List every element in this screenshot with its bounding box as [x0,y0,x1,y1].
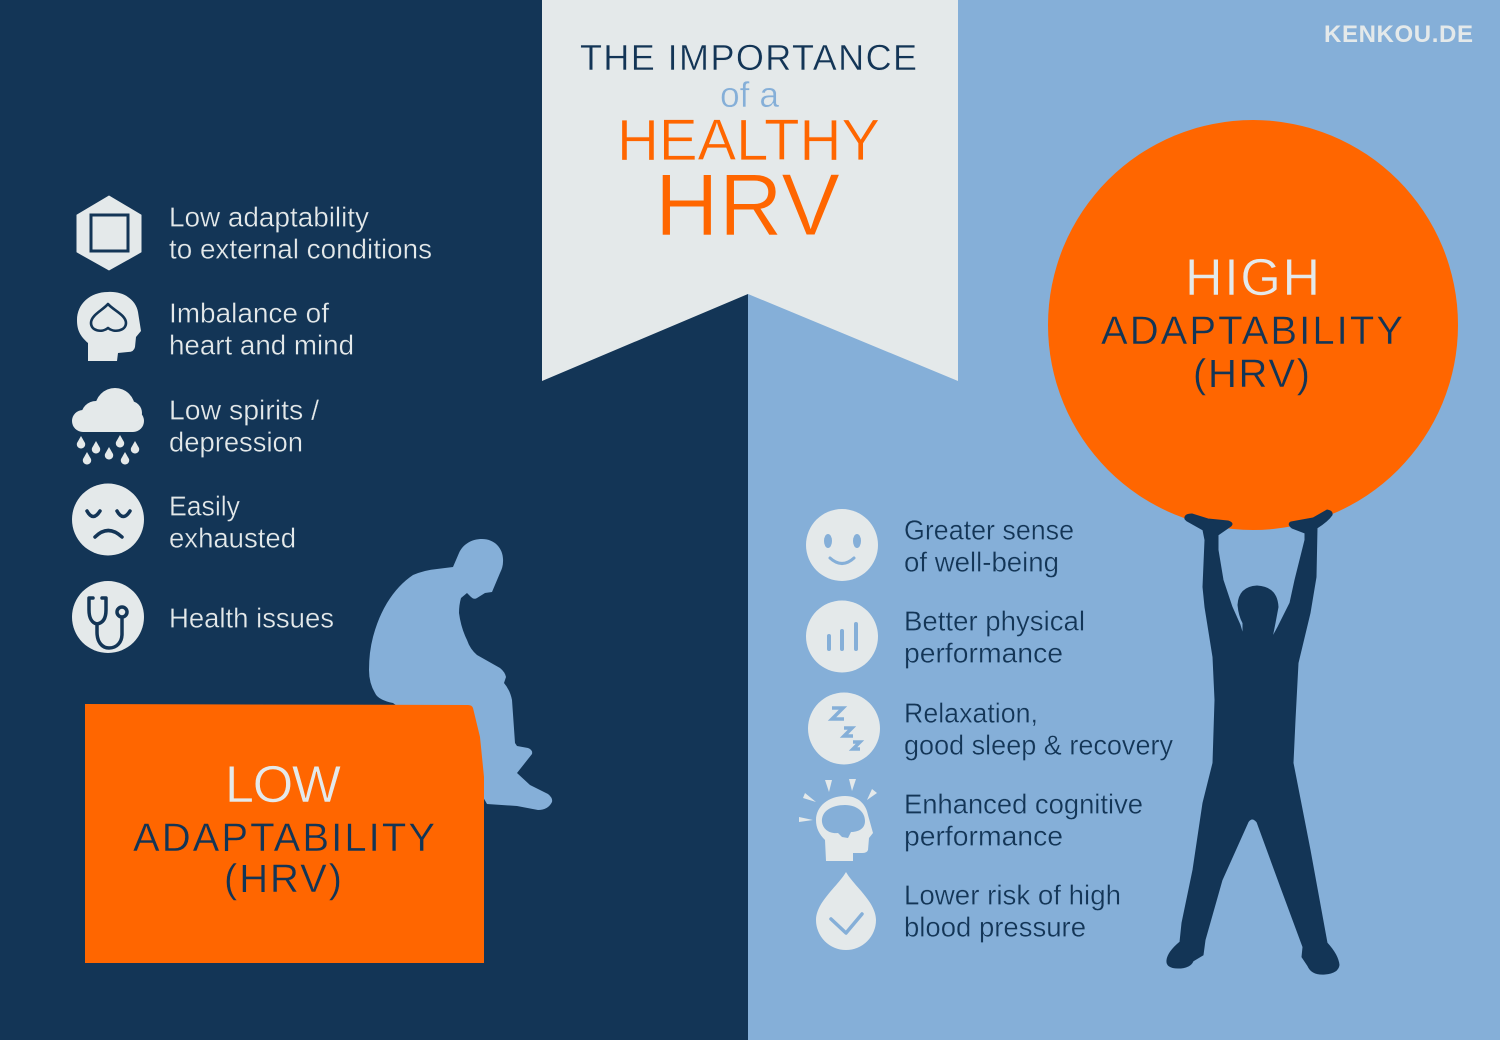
text: exhausted: Easily [169,490,240,522]
title line: of a: of a [720,74,780,115]
text: physical performance: performance [904,638,1063,668]
text: well-being [904,514,1074,578]
heading: high: HIGH [1185,249,1320,307]
icon: rain cloud [72,388,144,464]
text: relaxation: Relaxation, [904,698,1038,728]
text: low spirits: depression [169,426,303,458]
text: low adaptability: Low adaptability [169,202,369,232]
text: low spirits [169,394,319,458]
title line: HRV: HRV [655,155,840,254]
text: health issues: Health issues [169,602,334,634]
icon: drop with check [816,872,876,950]
figure: sitting man [369,539,552,810]
icon: hexagon with square [77,196,141,270]
text: relaxation: good sleep & recovery [904,730,1173,760]
text: imbalance: Imbalance of [169,298,329,328]
text: physical performance [904,606,1085,668]
icon: smiling face [806,509,878,581]
icon: sad face [72,484,144,556]
text: physical performance: Better physical [904,606,1085,636]
title line: the importance: THE IMPORTANCE [580,37,917,78]
heading: HRV: (HRV) [1193,352,1310,396]
text: cognitive performance: Enhanced cognitive [904,788,1143,820]
list: low adaptability effects [72,196,432,653]
text: imbalance: heart and mind [169,330,354,360]
panel: low adaptability box [85,704,484,963]
text: cognitive performance [904,788,1143,852]
text: well-being: of well-being [904,546,1059,578]
text: cognitive performance: performance [904,820,1063,852]
icon: bar chart [806,600,878,672]
title banner [542,0,958,381]
heading: HRV: (HRV) [224,857,342,901]
icon: head with brain [799,779,877,861]
figure: standing man holding circle [1167,510,1339,974]
text: low spirits: Low spirits / [169,394,319,426]
text: well-being: Greater sense [904,514,1074,546]
panel: low adaptability background [0,0,748,1040]
icon: stethoscope [72,581,144,653]
brand label: KENKOU.DE [1324,21,1473,48]
text: imbalance [169,298,354,360]
heading: low: LOW [225,756,341,814]
text: blood pressure [904,880,1121,942]
text: relaxation [904,698,1173,760]
text: exhausted: exhausted [169,522,296,554]
text: exhausted [169,490,296,554]
icon: sleep [808,692,880,764]
text: blood pressure: Lower risk of high [904,880,1121,910]
panel: high adaptability circle [1048,120,1458,530]
title line: healthy: HEALTHY [617,108,880,173]
list: high adaptability benefits [799,509,1173,950]
text: blood pressure: blood pressure [904,912,1086,942]
icon: head with heart [77,292,141,361]
heading: adaptability: ADAPTABILITY [133,816,435,860]
panel: high adaptability background [748,0,1500,1040]
heading: adaptability: ADAPTABILITY [1101,309,1403,353]
text: low adaptability: to external conditions [169,234,432,264]
text: low adaptability [169,202,432,264]
